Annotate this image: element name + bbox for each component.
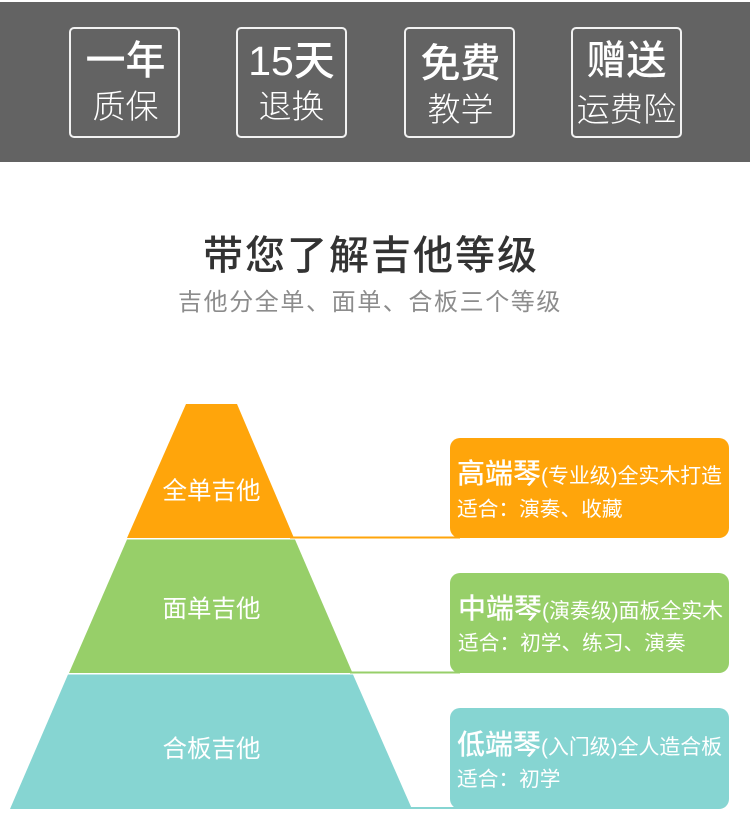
badge: free shipping insurance: 运费险: [577, 91, 676, 128]
pyramid tier: solid wood: [127, 404, 294, 538]
tier label: solid wood: 全单吉他: [162, 478, 260, 505]
badge: free shipping insurance: [571, 27, 682, 138]
connector: bottom tier: [405, 807, 460, 809]
badge: one year warranty: [69, 27, 180, 138]
badge: free lessons: 教学: [428, 91, 494, 128]
badge: 15 day return: 退换: [258, 88, 324, 125]
subtitle: 吉他分全单、面单、合板三个等级: [178, 289, 562, 316]
title: 带您了解吉他等级: [203, 234, 539, 278]
header band: [0, 2, 750, 162]
pyramid tier: laminate: [10, 674, 412, 809]
tier label: laminate: 合板吉他: [162, 736, 260, 763]
pyramid tier: solid top: [69, 540, 352, 673]
card: high end: 高端琴(专业级)全实木打造: [457, 458, 722, 489]
badge: free lessons: [404, 27, 515, 138]
connector: middle tier: [350, 672, 460, 674]
badge: one year warranty: 质保: [92, 88, 158, 125]
badge: 15 day return: [236, 27, 347, 138]
badge: 15 day return: 15天: [248, 38, 335, 84]
card: high end: [450, 438, 729, 538]
card: mid range: 中端琴(演奏级)面板全实木: [458, 593, 723, 624]
card: entry level: 适合：初学: [457, 768, 560, 791]
card: entry level: 低端琴(入门级)全人造合板: [457, 729, 722, 760]
connector: top tier: [290, 536, 460, 538]
card: mid range: 适合：初学、练习、演奏: [458, 632, 686, 655]
card: entry level: [450, 708, 729, 809]
badge: one year warranty: 一年: [86, 39, 166, 83]
card: mid range: [450, 573, 729, 673]
card: high end: 适合：演奏、收藏: [457, 498, 623, 521]
tier label: solid top: 面单吉他: [162, 596, 260, 623]
badge: free shipping insurance: 赠送: [586, 39, 666, 83]
badge: free lessons: 免费: [420, 42, 500, 86]
